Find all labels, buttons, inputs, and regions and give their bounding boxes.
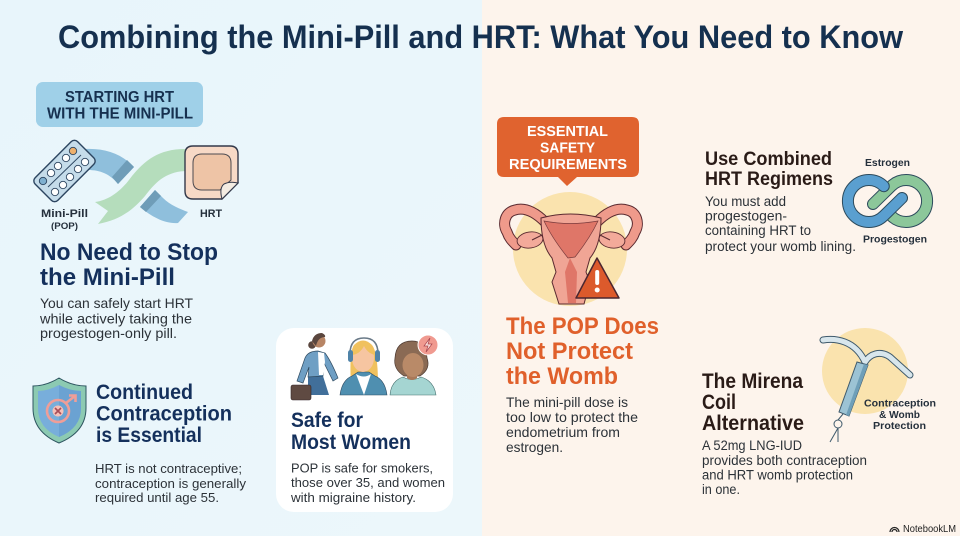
text: safe for most women body: with migraine history. (290, 490, 416, 505)
text: combined HRT body: containing HRT to (705, 223, 811, 238)
heading: POP does not protect: The POP Does (506, 313, 659, 340)
green ribbon (95, 149, 188, 224)
uterus organ (505, 209, 637, 304)
heading: continued contraception (96, 381, 232, 447)
label: contraception and womb protection: & Womb (879, 409, 920, 421)
callout: essential safety requirements: ESSENTIAL (527, 124, 608, 140)
heading: safe for most women: Most Women (291, 431, 411, 454)
label: HRT: HRT (200, 208, 222, 220)
heading: use combined HRT: HRT Regimens (705, 169, 833, 190)
heading: no need to stop: No Need to Stop (40, 239, 218, 266)
icon: woman with headphones (340, 338, 387, 395)
label: estrogen: Estrogen (865, 157, 910, 169)
icon: woman with briefcase (291, 333, 338, 400)
text: combined HRT body: protect your womb lining. (705, 239, 856, 254)
text: continued contraception body: contraception is generally (95, 476, 247, 491)
text: safe for most women body: those over 35, and women (291, 475, 445, 490)
panel: safe for most women (276, 328, 453, 512)
text: no need to stop body: progestogen-only pill. (40, 325, 177, 341)
icon: contraception shield (33, 378, 86, 443)
panel: right background (482, 0, 960, 536)
icon: blister pack (32, 138, 97, 204)
heading: Mirena coil alternative (702, 370, 804, 435)
panel: left background (0, 0, 482, 536)
text: Mirena body (702, 438, 867, 497)
label: POP: (POP) (51, 221, 78, 232)
text: safe for most women body: POP is safe for smokers, (291, 460, 433, 476)
heading: continued contraception: is Essential (96, 424, 202, 447)
icon: mini-pill and HRT patch diagram (32, 138, 238, 232)
heading: use combined HRT: Use Combined (705, 149, 832, 170)
label: contraception and womb protection (864, 398, 936, 432)
text: combined HRT body: progestogen- (705, 208, 787, 224)
text: combined HRT body (705, 194, 856, 254)
text: Mirena body: and HRT womb protection (702, 468, 853, 482)
callout: essential safety requirements: REQUIREMENTS (509, 157, 627, 173)
heading: Mirena coil alternative: Alternative (702, 412, 804, 435)
icon: linked estrogen and progestogen rings (848, 157, 927, 246)
text: Mirena body: in one. (702, 482, 740, 497)
text: Mirena body: provides both contraception (702, 453, 867, 468)
logo: NotebookLM: NotebookLM (903, 524, 956, 535)
heading: Mirena coil alternative: The Mirena (702, 370, 803, 393)
title: Combining the Mini-Pill and HRT: What You Need to Know (58, 19, 903, 55)
text: no need to stop body: You can safely start HRT (40, 295, 193, 311)
label: contraception and womb protection: Contraception (864, 398, 936, 410)
icon: woman with migraine (390, 335, 438, 395)
heading: POP does not protect (506, 313, 659, 390)
text: no need to stop body: while actively taking the (39, 310, 192, 326)
icon: uterus with warning (505, 192, 637, 306)
text: POP body: too low to protect the (506, 409, 638, 425)
heading: continued contraception: Contraception (96, 402, 232, 426)
heading: POP does not protect: the Womb (506, 363, 618, 390)
label: Mini-Pill: Mini-Pill (41, 208, 88, 220)
text: safe for most women body (290, 460, 445, 505)
heading: no need to stop: the Mini-Pill (40, 264, 175, 291)
text: Mirena body: A 52mg LNG-IUD (702, 438, 802, 453)
text: continued contraception body: HRT is not contraceptive; (95, 461, 242, 476)
heading: use combined HRT (705, 149, 833, 190)
blue ribbon (85, 149, 188, 223)
heading: no need to stop (40, 239, 218, 291)
heading: Mirena coil alternative: Coil (702, 391, 736, 414)
heading: safe for most women (291, 409, 411, 454)
heading: continued contraception: Continued (96, 381, 193, 404)
text: POP body (506, 394, 638, 455)
badge: starting HRT (36, 82, 203, 127)
text: POP body: The mini-pill dose is (506, 394, 628, 410)
callout: essential safety requirements (497, 117, 639, 186)
text: combined HRT body: You must add (705, 194, 786, 209)
icon: HRT patch (185, 146, 238, 199)
badge: starting HRT: STARTING HRT (65, 89, 175, 106)
text: POP body: estrogen. (506, 439, 563, 455)
warning triangle (576, 258, 619, 298)
badge: starting HRT: WITH THE MINI-PILL (47, 106, 193, 122)
heading: POP does not protect: Not Protect (506, 338, 633, 365)
text: POP body: endometrium from (506, 424, 620, 440)
label: progestogen: Progestogen (863, 234, 927, 246)
text: continued contraception body (95, 461, 247, 505)
text: continued contraception body: required until age 55. (95, 490, 219, 505)
icon: Mirena coil (822, 328, 936, 442)
label: contraception and womb protection: Protection (873, 420, 926, 432)
heading: safe for most women: Safe for (291, 409, 363, 432)
callout: essential safety requirements: SAFETY (540, 140, 595, 156)
text: no need to stop body (39, 295, 193, 341)
